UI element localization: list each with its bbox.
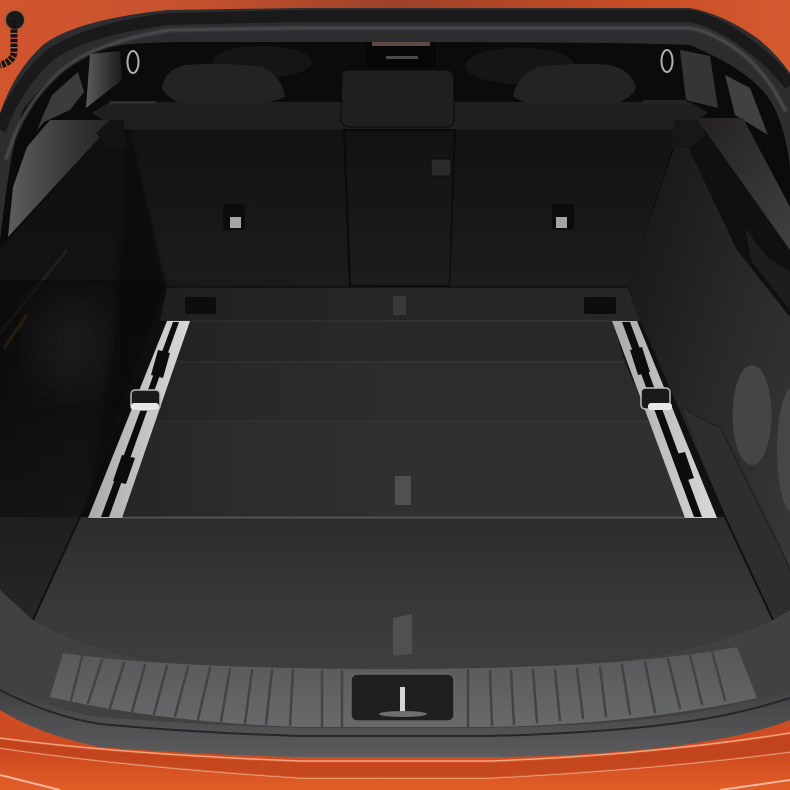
left cover hinge	[96, 120, 126, 148]
floor strap lower	[393, 614, 412, 656]
rear side window left	[86, 51, 122, 108]
seat latch centre	[431, 159, 451, 176]
right lower trim	[683, 407, 790, 620]
car body: upper orange paint	[0, 0, 790, 130]
right side wall	[627, 130, 790, 620]
left wall detail line	[0, 250, 67, 333]
front headrest shadow right	[465, 48, 575, 84]
rear window and cabin view	[0, 24, 790, 260]
floor panel three	[122, 421, 690, 517]
boot latch	[351, 674, 454, 721]
rear side window right	[680, 50, 718, 108]
carpet lip behind sill	[0, 590, 790, 750]
right quarter trim	[725, 75, 768, 135]
floor bracket left	[185, 297, 216, 314]
rail clip	[641, 388, 672, 410]
floor panel main	[33, 517, 773, 669]
left rail	[88, 321, 190, 518]
right folding cover	[693, 118, 790, 250]
lower paint highlight	[0, 775, 790, 790]
headrest centre	[341, 70, 454, 127]
left side wall	[0, 125, 167, 620]
headrest left	[162, 64, 285, 110]
rail clamps	[630, 347, 694, 482]
rail clamps	[113, 350, 170, 484]
left folding cover	[8, 120, 110, 237]
parcel shelf behind seats	[92, 102, 708, 130]
right storage slot	[745, 228, 790, 310]
paint highlight lines	[0, 733, 790, 778]
right cover hinge	[672, 120, 706, 148]
seat back right	[450, 130, 678, 286]
left quarter trim	[37, 72, 84, 130]
left side shading	[0, 280, 400, 517]
headrest right	[513, 64, 636, 110]
dashboard display	[366, 41, 436, 67]
cabin grab handle right	[662, 50, 672, 72]
floor bracket right	[584, 297, 616, 314]
left wall glow	[28, 295, 112, 395]
floor strap middle	[395, 476, 411, 505]
upper seal highlight	[6, 28, 786, 160]
floor strap top	[393, 296, 406, 315]
cable grommet and cable	[0, 10, 25, 65]
upper seal outer dark band	[0, 16, 790, 130]
rail clip	[131, 390, 160, 410]
shelf handle left	[108, 101, 156, 111]
rear seal shadow line	[0, 690, 790, 736]
car body: lower orange paint	[0, 700, 790, 790]
floor section rear	[160, 287, 640, 321]
left wall amber reflection	[4, 315, 27, 348]
shelf handle right	[642, 100, 690, 110]
cabin grab handle left	[128, 51, 138, 73]
soft left corner shadow	[90, 130, 166, 500]
rear seal	[0, 683, 790, 757]
seat top trim	[92, 104, 708, 129]
front headrest shadow left	[212, 46, 312, 78]
floor panel one	[172, 321, 625, 362]
back wall base line	[167, 286, 627, 288]
speaker second	[777, 388, 790, 512]
floor edges	[33, 322, 773, 620]
speaker	[732, 365, 772, 465]
scuff plate	[50, 647, 757, 727]
upper door seal	[0, 8, 790, 240]
right storage rail	[680, 130, 790, 317]
floor panel two	[152, 362, 650, 421]
seat back centre	[344, 130, 455, 286]
scuff plate ribs	[71, 651, 725, 726]
right trim edge	[683, 407, 790, 570]
darker paint band	[0, 735, 790, 778]
seat backs	[130, 130, 678, 286]
seat latch left	[223, 204, 245, 230]
right rail	[612, 321, 717, 518]
floor panel dividers	[152, 321, 650, 421]
seat back left	[130, 130, 350, 286]
seat latch right	[552, 204, 574, 230]
